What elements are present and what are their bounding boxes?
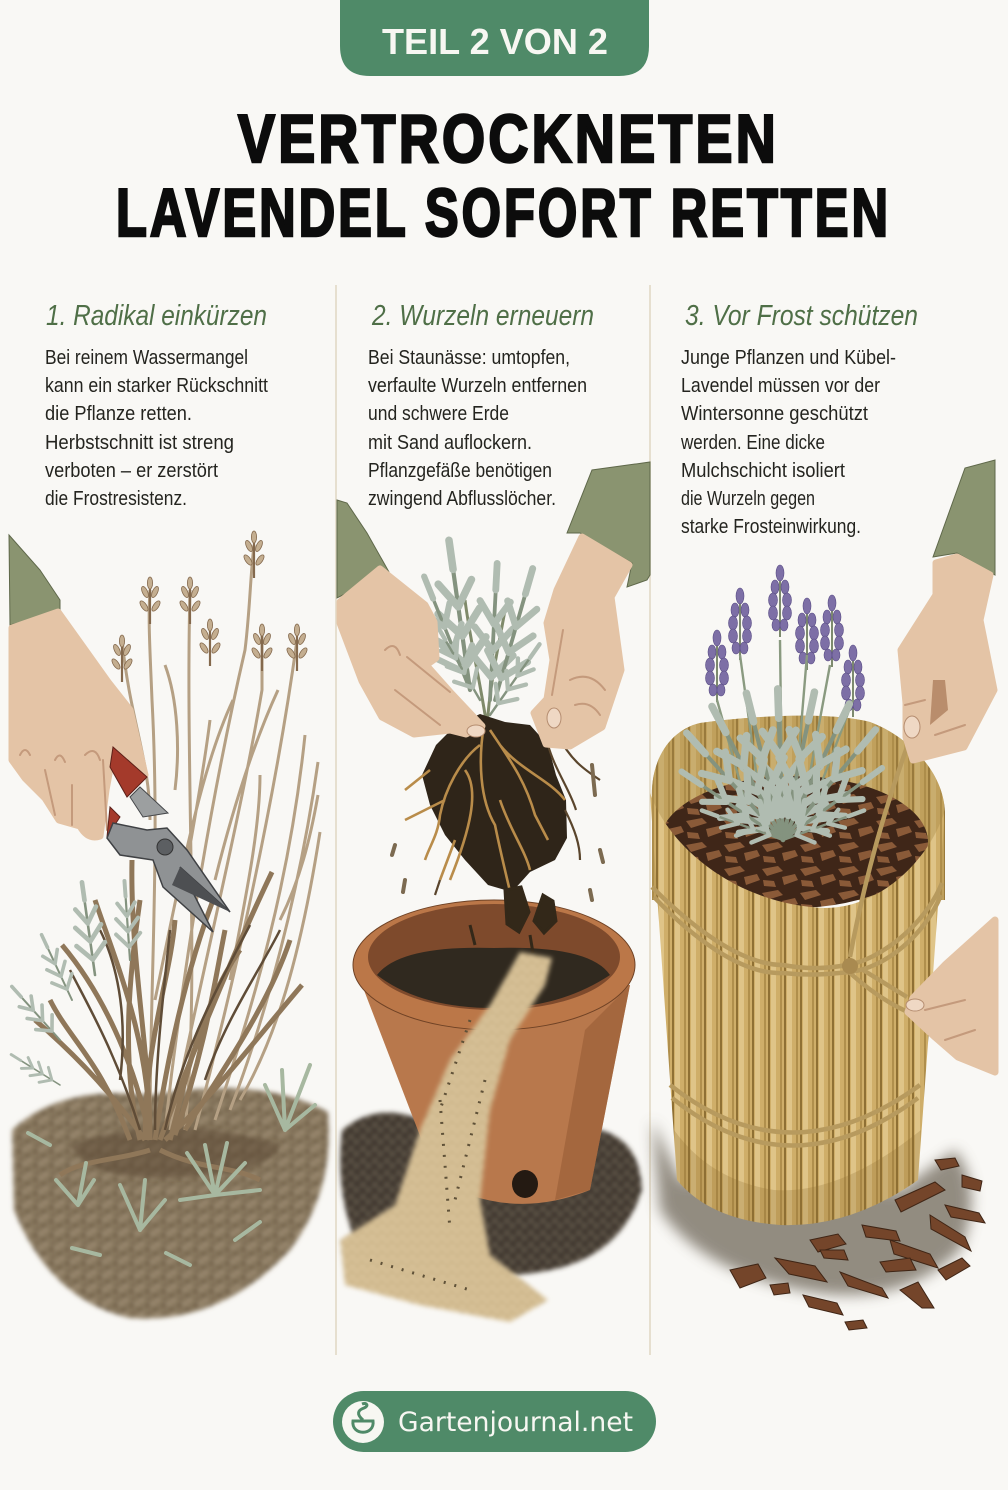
header badge: Teil 2 von 2 — [340, 0, 649, 76]
root ball — [392, 714, 603, 900]
terracotta pot — [353, 900, 635, 1204]
panel: step 1 text — [45, 300, 268, 510]
text block: step 1: verboten – er zerstört — [45, 460, 218, 482]
text block: step 3: die Wurzeln gegen — [681, 488, 815, 510]
panel: step 3 text — [680, 300, 918, 538]
lavender bush — [670, 565, 893, 856]
pruning shears — [107, 747, 230, 932]
panel: step 2 text — [368, 300, 594, 510]
text block: step 3: werden. Eine dicke — [680, 432, 825, 454]
ground — [652, 1120, 971, 1295]
dark soil on ground — [340, 1112, 642, 1277]
woody lower bush — [35, 860, 302, 1180]
title — [116, 101, 891, 251]
text block: step 2: Pflanzgefäße benötigen — [368, 460, 552, 482]
sleeve — [9, 535, 60, 625]
mulch top — [660, 776, 928, 908]
bark mulch chips — [730, 1158, 985, 1330]
text block: step 2: Bei Staunässe: umtopfen, — [368, 347, 570, 369]
text block: step 2 — [368, 347, 587, 510]
lavender plant held up — [407, 537, 553, 727]
ground with debris — [12, 1088, 329, 1319]
text block: step 2: zwingend Abflusslöcher. — [368, 488, 556, 510]
sleeve left — [337, 500, 389, 598]
footer brand pill — [333, 1391, 656, 1452]
heading: step 2: 2. Wurzeln erneuern — [371, 300, 594, 332]
text block: step 2: verfaulte Wurzeln entfernen — [368, 375, 587, 397]
brand name: Gartenjournal.net — [398, 1407, 633, 1438]
grey-green sprigs — [4, 880, 142, 1092]
text block: step 3: Wintersonne geschützt — [681, 403, 868, 425]
hand left — [340, 569, 485, 737]
hand upper right — [901, 557, 994, 760]
illustration: pruning dry lavender — [4, 531, 329, 1319]
sand stream and heap — [340, 952, 552, 1322]
text block: step 1: die Frostresistenz. — [45, 488, 187, 510]
text block: step 1: Bei reinem Wassermangel — [45, 347, 248, 369]
reed stripes back — [652, 716, 945, 900]
rope ties — [652, 747, 942, 1146]
illustration: winter protection with reed mat — [650, 460, 995, 1330]
text block: step 1: die Pflanze retten. — [45, 403, 192, 425]
text block: step 3: Lavendel müssen vor der — [681, 375, 880, 397]
text block: step 2: mit Sand auflockern. — [368, 432, 532, 454]
header badge: Teil 2 von 2: TEIL 2 VON 2 — [382, 21, 608, 62]
sleeve upper right — [933, 460, 995, 575]
heading: step 3: 3. Vor Frost schützen — [685, 300, 918, 332]
falling soil clumps — [470, 887, 556, 953]
title: VERTROCKNETEN — [238, 101, 779, 177]
hand right — [534, 537, 629, 746]
hand — [12, 612, 145, 837]
text block: step 3: Junge Pflanzen und Kübel- — [681, 347, 896, 369]
text block: step 1: kann ein starker Rückschnitt — [45, 375, 268, 397]
text block: step 2: und schwere Erde — [368, 403, 509, 425]
reed mat front wall — [650, 793, 945, 1225]
tall dry stems with seed heads — [110, 531, 320, 1130]
text block: step 3 — [680, 347, 896, 538]
reed mat back wall — [652, 716, 945, 900]
sleeve right — [567, 462, 650, 587]
icon: seedling logo — [342, 1401, 384, 1443]
text block: step 3: Mulchschicht isoliert — [681, 460, 845, 482]
text block: step 1: Herbstschnitt ist streng — [45, 432, 234, 454]
small new shoots — [28, 1065, 315, 1265]
illustration: root renewal and repotting — [337, 462, 650, 1322]
text block: step 1 — [45, 347, 268, 510]
text block: step 3: starke Frosteinwirkung. — [681, 516, 861, 538]
hand lower right — [906, 920, 995, 1072]
flower spikes — [706, 565, 864, 717]
heading: step 1: 1. Radikal einkürzen — [46, 300, 267, 332]
